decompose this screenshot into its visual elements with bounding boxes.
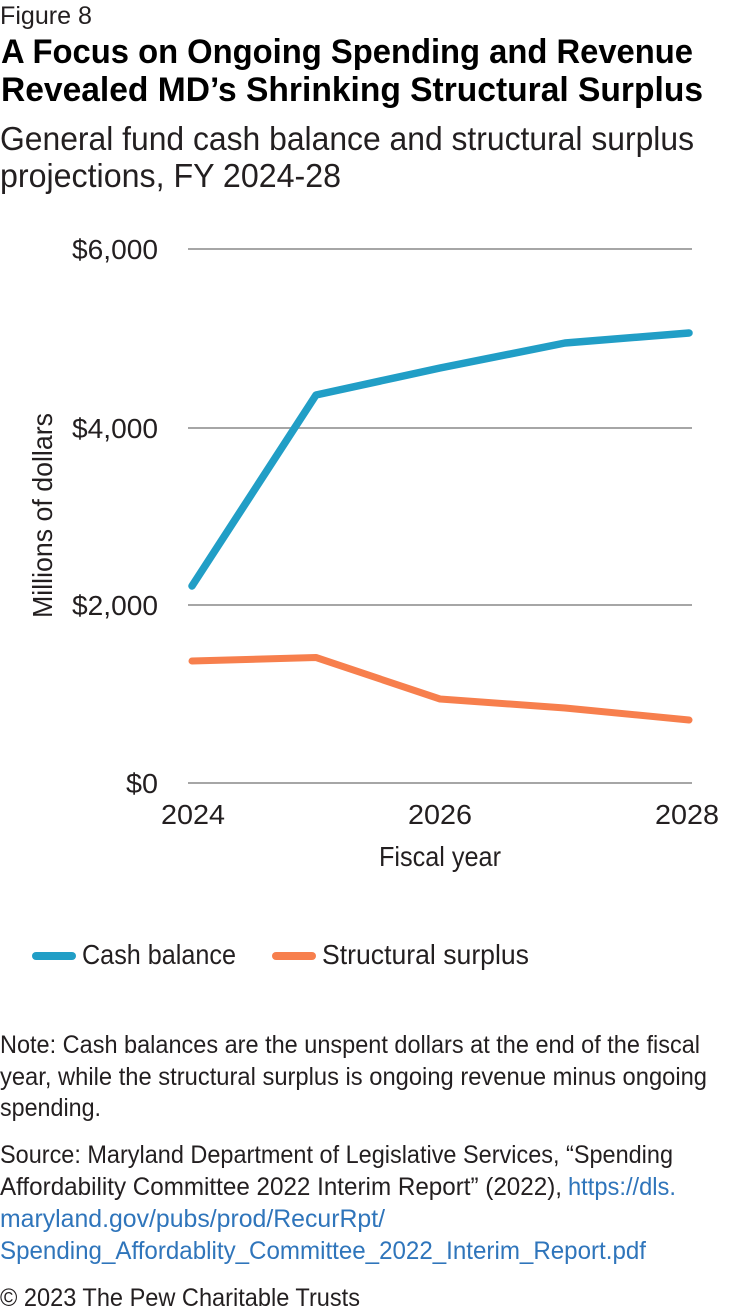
subtitle xyxy=(0,120,694,194)
title xyxy=(1,33,703,109)
source: maryland.gov/pubs/prod/RecurRpt/ xyxy=(0,1205,385,1233)
legend: structural surplus: Structural surplus xyxy=(322,939,529,970)
line chart xyxy=(27,234,719,872)
title: Revealed MD’s Shrinking Structural Surplus xyxy=(1,71,703,109)
y axis labels: $2,000 xyxy=(72,590,158,621)
legend: cash balance: Cash balance xyxy=(82,939,236,970)
gridlines xyxy=(188,249,692,783)
subtitle: General fund cash balance and structural surplus xyxy=(0,120,694,157)
x axis labels xyxy=(161,799,719,830)
source: Affordability Committee 2022 Interim Report” (2022), xyxy=(0,1173,562,1201)
source: Source: Maryland Department of Legislative Services, “Spending xyxy=(0,1141,673,1169)
note: year, while the structural surplus is ongoing revenue minus ongoing xyxy=(0,1063,707,1091)
x axis labels: 2026 xyxy=(408,799,472,830)
note: spending. xyxy=(0,1094,101,1122)
copyright: © 2023 The Pew Charitable Trusts xyxy=(0,1284,360,1312)
line: structural surplus xyxy=(192,658,689,720)
y axis labels: $6,000 xyxy=(72,234,158,265)
y axis labels: $4,000 xyxy=(72,413,158,444)
note: Note: Cash balances are the unspent dollars at the end of the fiscal xyxy=(0,1031,700,1059)
note xyxy=(0,1031,707,1122)
y axis labels xyxy=(72,234,158,799)
x axis labels: 2028 xyxy=(655,799,719,830)
source: Spending_Affordablity_Committee_2022_Interim_Report.pdf xyxy=(0,1237,646,1265)
legend xyxy=(36,939,529,970)
source xyxy=(0,1141,676,1265)
line: cash balance xyxy=(192,333,689,586)
y axis labels: $0 xyxy=(126,768,158,799)
x axis labels: 2024 xyxy=(161,799,225,830)
subtitle: projections, FY 2024-28 xyxy=(0,157,341,194)
title: A Focus on Ongoing Spending and Revenue xyxy=(1,33,693,71)
y axis title: Millions of dollars xyxy=(27,413,58,618)
x axis title: Fiscal year xyxy=(379,841,501,872)
figure label: Figure 8 xyxy=(0,2,92,30)
source: https://dls. xyxy=(568,1173,676,1201)
